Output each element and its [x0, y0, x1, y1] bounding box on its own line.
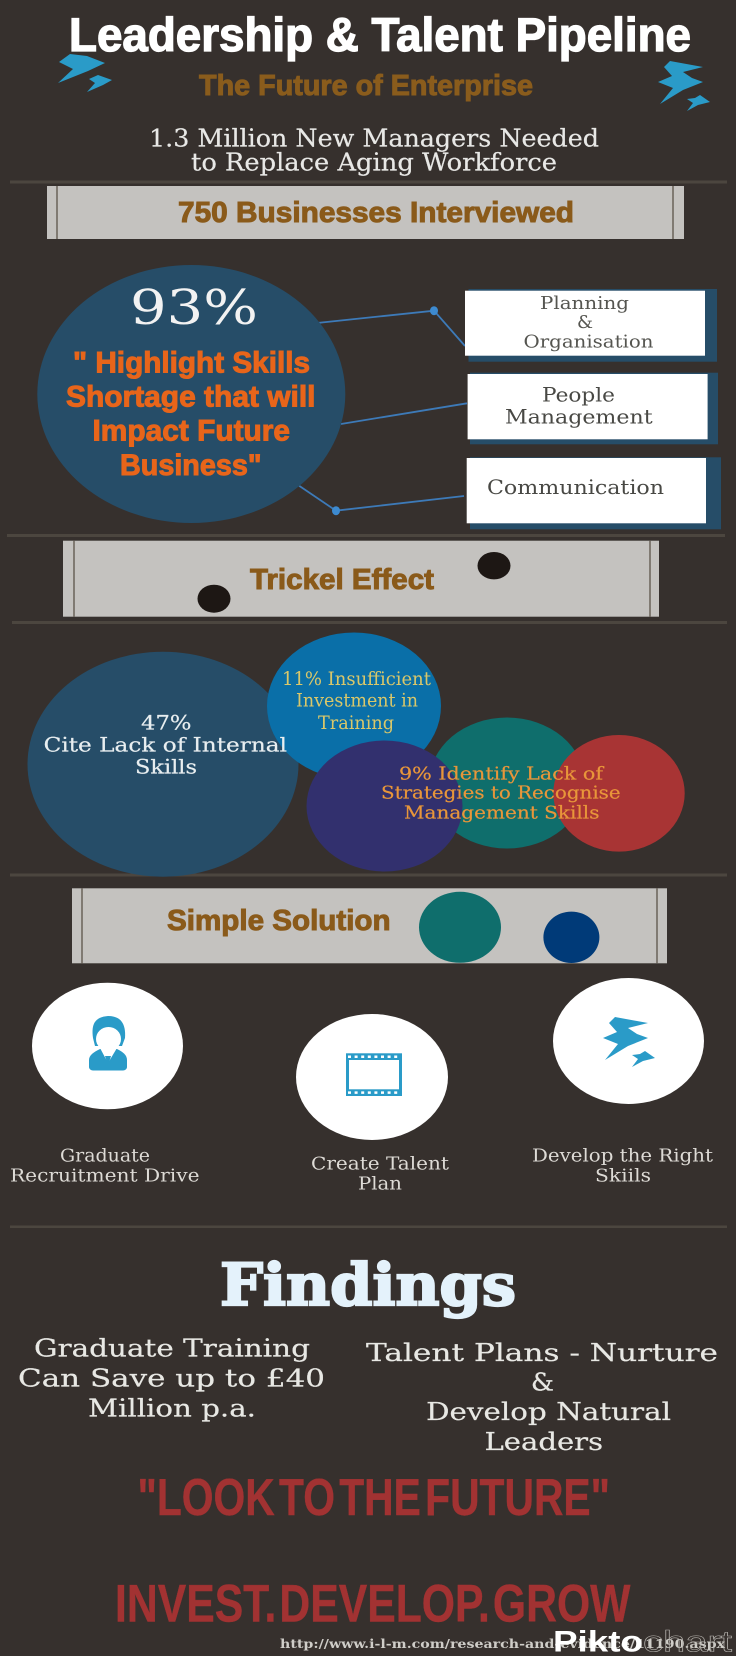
label: graduate recruitment drive — [10, 1147, 200, 1186]
icon: lightning bolts right — [658, 61, 710, 111]
finding: talent plans: & — [531, 1369, 554, 1397]
stat: 93%: 93% — [130, 280, 258, 336]
bubble chart: causes — [28, 632, 685, 877]
box: communication — [467, 457, 721, 529]
text: 47% lack of internal skills: 47% — [141, 710, 192, 734]
solution: graduate recruitment — [10, 983, 200, 1186]
label: graduate recruitment drive: Recruitment Drive — [10, 1166, 200, 1186]
bubble: red — [553, 735, 685, 852]
text: 9% lack of strategies — [381, 763, 621, 823]
bubble: 47% — [28, 652, 298, 877]
box: planning and organisation: & — [577, 312, 593, 333]
label: create talent plan: Plan — [358, 1174, 402, 1194]
label: develop the right skills: Develop the Right — [532, 1147, 713, 1167]
box: planning and organisation — [465, 289, 717, 362]
finding: talent plans: Talent Plans - Nurture — [366, 1339, 718, 1367]
finding: talent plans: Leaders — [484, 1428, 603, 1456]
finding: talent plans — [366, 1339, 718, 1456]
text: 47% lack of internal skills — [44, 710, 287, 778]
banner: 750 businesses: 750 Businesses Interviewed — [178, 197, 574, 229]
solution: talent plan — [296, 1014, 449, 1194]
box: planning and organisation: Planning — [540, 293, 629, 314]
slogan: look to the future: "LOOK TO THE FUTURE" — [138, 1469, 610, 1527]
finding: graduate training: Million p.a. — [88, 1394, 256, 1422]
finding: graduate training: Can Save up to £40 — [18, 1365, 325, 1393]
solution: develop skills — [532, 978, 713, 1187]
source url: http://www.i-l-m.com/research-and-evidence/11190.aspx — [280, 1637, 726, 1651]
quote: highlight skills — [66, 346, 316, 482]
box: people management: People — [542, 383, 615, 407]
box: planning and organisation: Organisation — [524, 331, 654, 352]
box: people management — [468, 373, 718, 444]
bubble: purple — [306, 740, 462, 872]
text: 47% lack of internal skills: Cite Lack of Internal — [44, 733, 287, 757]
icon: film strip — [346, 1053, 402, 1096]
text: 9% lack of strategies: 9% Identify Lack of — [399, 763, 605, 784]
banner: simple solution: Simple Solution — [167, 905, 391, 937]
finding: graduate training: Graduate Training — [34, 1335, 310, 1363]
intro text — [149, 125, 599, 177]
text: 11% insufficient investment: 11% Insufficient — [282, 669, 432, 690]
quote: highlight skills: Impact Future — [92, 415, 290, 448]
icon: lightning — [603, 1017, 655, 1067]
box: communication: Communication — [487, 475, 664, 499]
panel: 93% circle — [37, 265, 345, 523]
quote: highlight skills: Business" — [120, 449, 262, 482]
subtitle: The Future of Enterprise — [199, 70, 533, 102]
finding: graduate training — [18, 1335, 325, 1422]
icon: person — [89, 1016, 127, 1070]
box: people management: Management — [505, 404, 653, 428]
watermark: piktochart — [553, 1626, 733, 1656]
finding: talent plans: Develop Natural — [426, 1398, 671, 1426]
text: 11% insufficient investment: Investment in — [296, 691, 418, 712]
label: graduate recruitment drive: Graduate — [60, 1147, 150, 1167]
label: develop the right skills — [532, 1147, 713, 1187]
banner: 750 businesses — [47, 186, 684, 239]
intro text: 1.3 Million New Managers Needed — [149, 125, 599, 153]
bubble: teal — [429, 718, 585, 848]
title: Leadership & Talent Pipeline — [69, 8, 691, 61]
bubble: 11% — [267, 632, 441, 780]
quote: highlight skills: Shortage that will — [66, 381, 316, 414]
text: 11% insufficient investment: Training — [318, 713, 394, 734]
text: 9% lack of strategies: Strategies to Recognise — [381, 783, 621, 804]
label: develop the right skills: Skiils — [595, 1167, 651, 1187]
text: 11% insufficient investment — [282, 669, 432, 734]
label: create talent plan: Create Talent — [311, 1154, 449, 1174]
intro text: to Replace Aging Workforce — [191, 149, 557, 177]
label: create talent plan — [311, 1154, 449, 1194]
text: 47% lack of internal skills: Skills — [135, 754, 197, 778]
text: 9% lack of strategies: Management Skills — [404, 802, 600, 823]
slogan: invest develop grow: INVEST. DEVELOP. GROW — [115, 1575, 630, 1634]
banner: simple solution — [72, 888, 667, 963]
banner: trickel effect: Trickel Effect — [250, 564, 434, 596]
heading: findings: Findings — [220, 1251, 516, 1319]
connector lines — [298, 306, 467, 515]
quote: highlight skills: " Highlight Skills — [73, 346, 310, 379]
icon: lightning bolts left — [58, 54, 112, 92]
banner: trickel effect — [63, 541, 659, 617]
